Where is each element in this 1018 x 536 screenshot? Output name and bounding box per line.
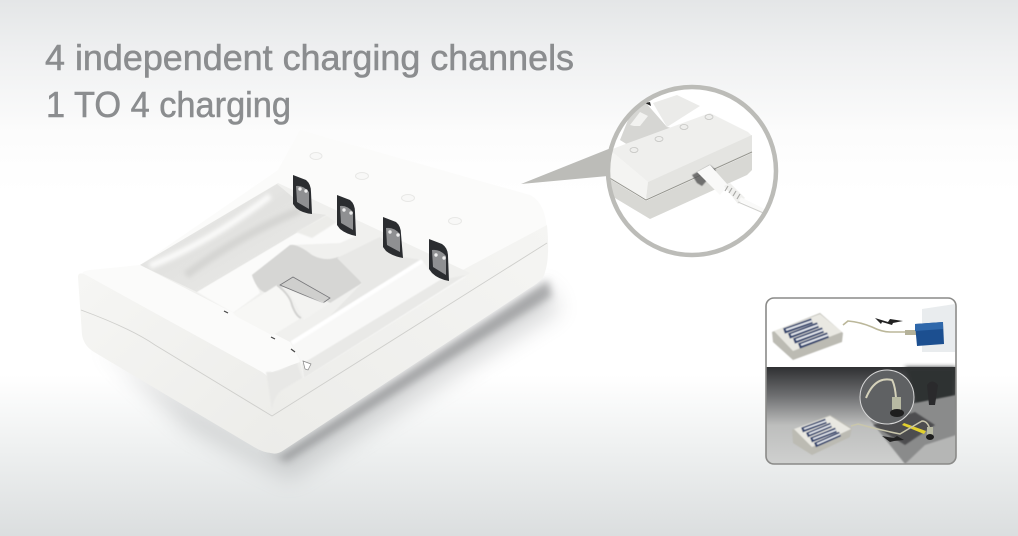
ridge two — [233, 285, 301, 342]
LED indicators — [310, 152, 462, 224]
ridge shadow — [296, 215, 337, 238]
corner shading — [266, 360, 302, 410]
car interior scene — [766, 367, 956, 464]
wall socket scene — [772, 304, 955, 360]
usage photo panel — [766, 298, 956, 464]
inset upper shell left face — [610, 152, 648, 199]
car plug — [927, 427, 933, 435]
inset detail circle — [860, 370, 914, 424]
car console — [870, 395, 956, 464]
inset lower shell — [608, 153, 752, 219]
charger drop shadow — [100, 280, 560, 480]
inset tray — [653, 95, 700, 127]
small rear contact marks — [224, 311, 311, 370]
inset upper shell end face — [646, 135, 752, 199]
battery tray cavity — [140, 183, 470, 378]
center cutout floor — [289, 291, 330, 320]
center cutout rim — [280, 277, 330, 303]
car cable — [851, 421, 930, 434]
title line 1: 4 independent charging channels — [45, 37, 574, 78]
metal contact 1 — [293, 175, 312, 214]
inset USB cable — [692, 165, 768, 215]
car lightning — [882, 436, 904, 442]
right side wall — [266, 225, 548, 454]
front lip — [84, 265, 300, 372]
metal contact 3 — [383, 217, 403, 258]
inset ring — [608, 87, 776, 255]
seam line — [81, 243, 547, 416]
car mini charger — [792, 415, 852, 455]
title — [45, 37, 574, 125]
yellow tape — [902, 423, 926, 434]
title line 2: 1 TO 4 charging — [46, 84, 291, 125]
inset charger rear — [608, 95, 768, 219]
magnified inset circle — [608, 87, 776, 255]
center cutout — [252, 245, 362, 303]
upper right slot — [330, 237, 422, 316]
charger body — [78, 130, 548, 454]
back slot floor — [140, 184, 327, 292]
panel border — [766, 298, 956, 464]
charger product illustration — [78, 130, 560, 480]
mini cable — [843, 321, 908, 332]
metal contact 2 — [337, 195, 356, 236]
inset upper shell top face — [610, 113, 752, 182]
ridge one — [197, 215, 356, 313]
metal contact 4 — [429, 239, 449, 281]
ridge three lower floor — [302, 275, 466, 378]
callout pointer — [521, 148, 611, 184]
blue USB adapter — [905, 322, 944, 346]
ridge three — [290, 260, 467, 378]
mini lightning bolts — [875, 318, 903, 325]
top face — [82, 130, 547, 400]
car gear stick — [928, 382, 938, 405]
mini charger top — [772, 313, 843, 360]
inset LEDs — [630, 114, 713, 152]
car dash right — [905, 367, 956, 410]
front wall — [78, 273, 274, 453]
